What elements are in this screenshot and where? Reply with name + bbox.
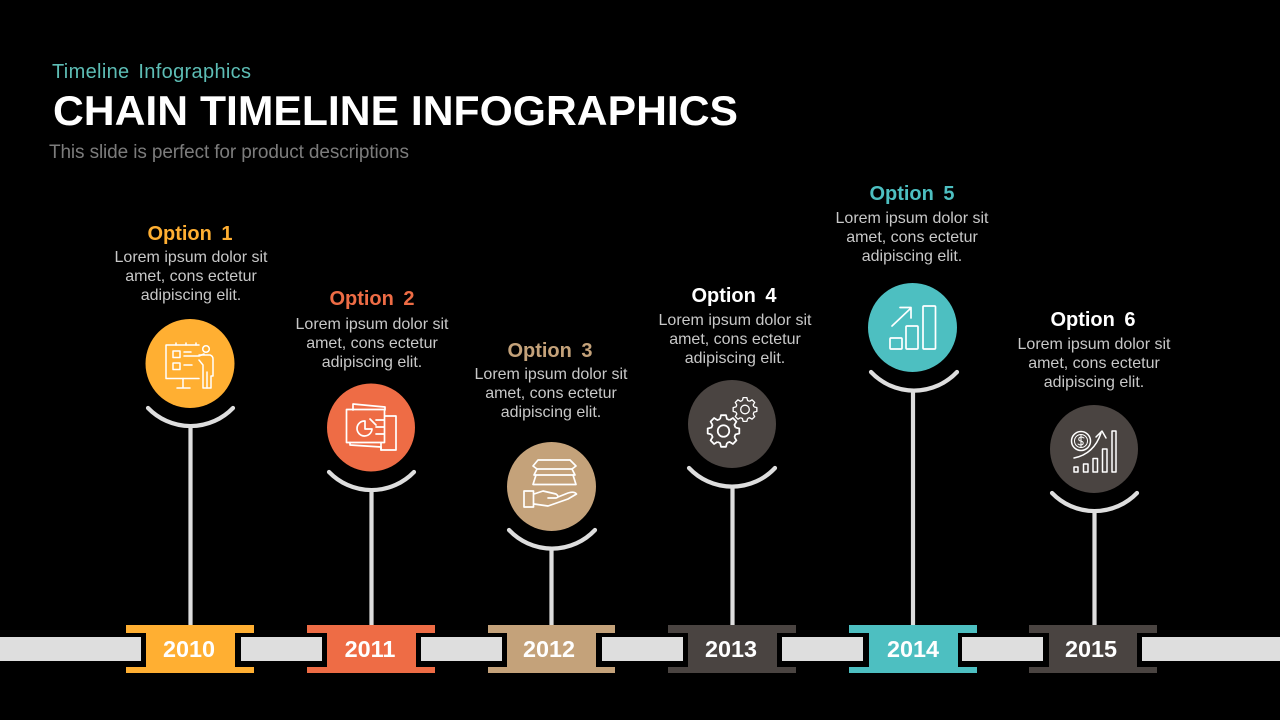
heading: option 5: Option 5 xyxy=(869,183,955,205)
year tab: 2010: 2010 xyxy=(163,636,215,662)
year tab: 2015: 2015 xyxy=(1065,636,1117,662)
year tab: 2011 xyxy=(307,625,435,673)
icon circle: hand holding stack xyxy=(507,442,596,531)
cradle arc and stem xyxy=(329,472,414,626)
year tab: 2014: 2014 xyxy=(887,636,939,662)
eyebrow text: Timeline Infographics xyxy=(52,61,251,83)
text: option 3: amet, cons ectetur xyxy=(485,385,617,402)
icon circle: presenter at board xyxy=(146,319,234,408)
cradle arc and stem xyxy=(871,372,957,626)
text: option 6: amet, cons ectetur xyxy=(1028,355,1160,372)
chain bar segments xyxy=(0,637,1280,661)
heading: option 4: Option 4 xyxy=(691,285,777,307)
icon circle: gears xyxy=(688,380,776,468)
text: option 1: Lorem ipsum dolor sit xyxy=(115,249,268,266)
year tab: 2012 xyxy=(488,625,615,673)
year tab: 2015 xyxy=(1029,625,1157,673)
text: option 6: adipiscing elit. xyxy=(1044,374,1144,391)
icon circle: money growth xyxy=(1050,405,1138,493)
cradle arc and stem xyxy=(509,530,595,626)
heading: option 2: Option 2 xyxy=(329,288,415,310)
text: option 3: Lorem ipsum dolor sit xyxy=(475,366,628,383)
cradle arc and stem xyxy=(148,408,233,626)
text: option 5: amet, cons ectetur xyxy=(846,229,978,246)
text: option 5: adipiscing elit. xyxy=(862,248,962,265)
year tab: 2012: 2012 xyxy=(523,636,575,662)
milestone 6: 2015 xyxy=(1018,309,1171,673)
milestone 2: 2011 xyxy=(296,288,449,673)
text: option 4: Lorem ipsum dolor sit xyxy=(659,312,812,329)
year tab: 2013: 2013 xyxy=(705,636,757,662)
year tab: 2013 xyxy=(668,625,796,673)
milestone 5: 2014 xyxy=(836,183,989,673)
cradle arc and stem xyxy=(1052,493,1137,626)
cradle arc and stem xyxy=(689,468,775,626)
year tab: 2010 xyxy=(126,625,254,673)
text: option 4: adipiscing elit. xyxy=(685,350,785,367)
subtitle: This slide is perfect for product descriptions xyxy=(49,142,409,163)
text: option 2: Lorem ipsum dolor sit xyxy=(296,316,449,333)
milestone 1: 2010 xyxy=(115,223,268,673)
text: option 5: Lorem ipsum dolor sit xyxy=(836,210,989,227)
milestone 4: 2013 xyxy=(659,285,812,673)
header xyxy=(49,61,738,163)
icon circle: report pages xyxy=(327,384,415,472)
text: option 1: adipiscing elit. xyxy=(141,287,241,304)
year tab: 2011: 2011 xyxy=(345,636,395,662)
icon circle: growth bars xyxy=(868,283,957,372)
heading: option 1: Option 1 xyxy=(147,223,233,245)
year tab: 2014 xyxy=(849,625,977,673)
text: option 2: adipiscing elit. xyxy=(322,354,422,371)
heading: option 3: Option 3 xyxy=(507,340,593,362)
text: option 4: amet, cons ectetur xyxy=(669,331,801,348)
milestone 3: 2012 xyxy=(475,340,628,673)
heading: option 6: Option 6 xyxy=(1050,309,1136,331)
text: option 3: adipiscing elit. xyxy=(501,404,601,421)
text: option 1: amet, cons ectetur xyxy=(125,268,257,285)
text: option 6: Lorem ipsum dolor sit xyxy=(1018,336,1171,353)
text: option 2: amet, cons ectetur xyxy=(306,335,438,352)
title: CHAIN TIMELINE INFOGRAPHICS xyxy=(53,87,738,134)
